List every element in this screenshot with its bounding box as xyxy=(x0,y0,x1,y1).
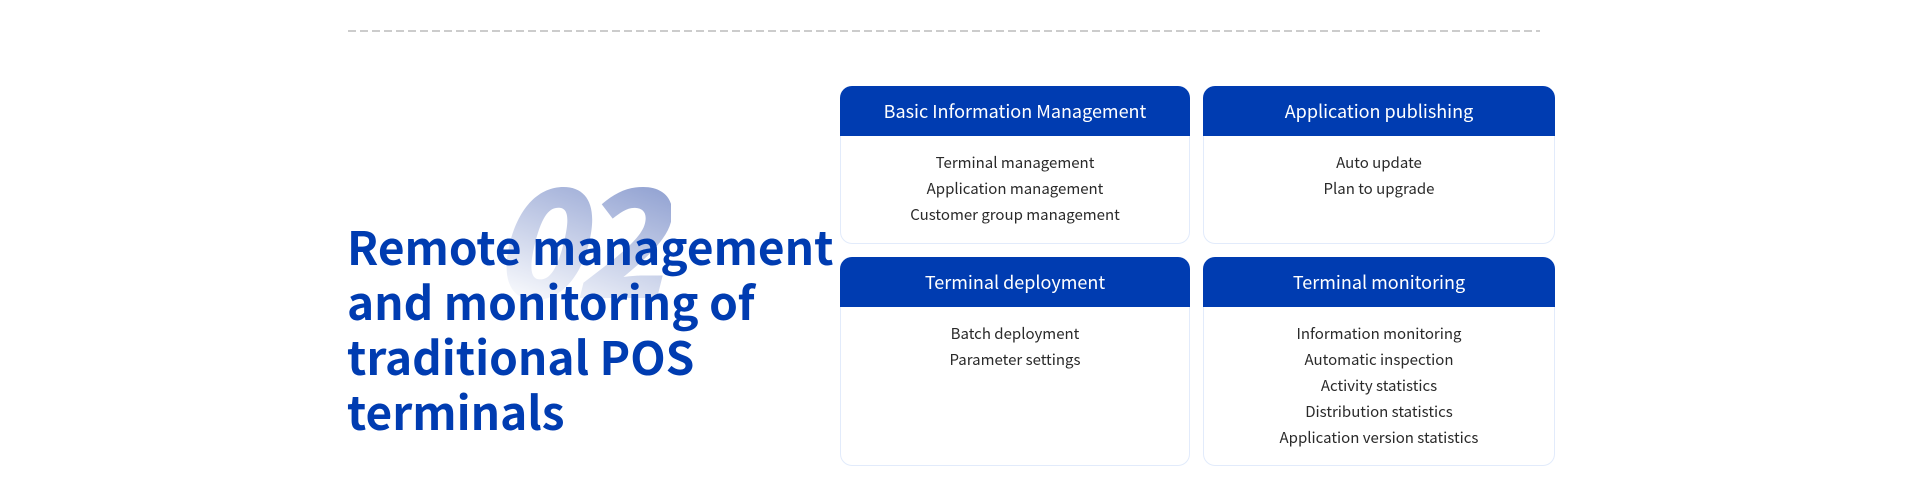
panel list xyxy=(910,152,1120,225)
panel title: Terminal deployment xyxy=(925,269,1105,295)
panel list: Customer group management xyxy=(910,204,1120,225)
panel list: Application management xyxy=(927,178,1103,199)
heading: and monitoring of xyxy=(347,268,755,334)
panel title xyxy=(1203,86,1555,136)
panel title: Basic Information Management xyxy=(884,98,1146,124)
large number 02: 02 xyxy=(490,125,657,342)
panel list: Application version statistics xyxy=(1280,427,1478,448)
panel list: Auto update xyxy=(1336,152,1422,173)
panel list: Terminal management xyxy=(936,152,1094,173)
panel title: Application publishing xyxy=(1285,98,1473,124)
heading xyxy=(347,213,834,444)
panel list: Information monitoring xyxy=(1296,323,1462,344)
panel list xyxy=(1324,152,1434,199)
heading: terminals xyxy=(347,378,565,444)
heading: traditional POS xyxy=(347,323,694,389)
panel list: Plan to upgrade xyxy=(1324,178,1434,199)
dashed divider xyxy=(348,30,1540,32)
heading: Remote management xyxy=(347,213,834,279)
panel title xyxy=(1203,257,1555,307)
panel: application publishing xyxy=(1203,86,1555,244)
panel title xyxy=(840,257,1190,307)
panel list: Activity statistics xyxy=(1321,375,1437,396)
panel list: Batch deployment xyxy=(951,323,1079,344)
panel: terminal monitoring xyxy=(1203,257,1555,466)
panel title: Terminal monitoring xyxy=(1293,269,1465,295)
panel: terminal deployment xyxy=(840,257,1190,466)
panel list: Parameter settings xyxy=(950,349,1080,370)
panel: basic information management xyxy=(840,86,1190,244)
panel title xyxy=(840,86,1190,136)
panel list: Automatic inspection xyxy=(1305,349,1453,370)
panel list xyxy=(1280,323,1478,448)
panel list xyxy=(950,323,1080,370)
panel list: Distribution statistics xyxy=(1305,401,1453,422)
